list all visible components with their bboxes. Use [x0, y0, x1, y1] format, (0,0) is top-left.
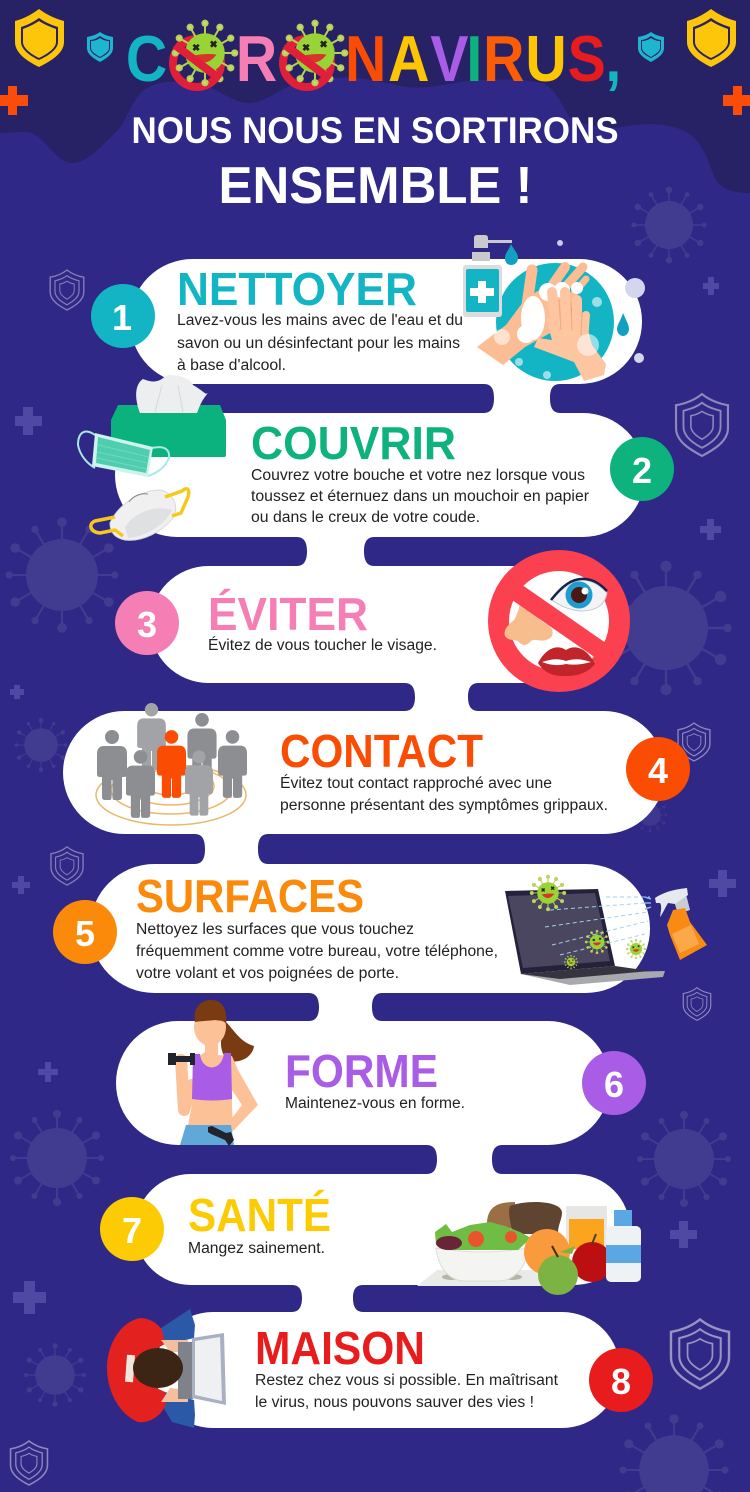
title line 1: V [430, 23, 469, 95]
body text [136, 921, 498, 982]
background virus [6, 517, 118, 633]
body text [255, 1372, 559, 1411]
background shield [671, 1319, 729, 1389]
heading: nettoyer: NETTOYER [177, 263, 417, 315]
icon: hand washing [477, 263, 614, 381]
number badge 1 [91, 284, 155, 348]
background virus [631, 187, 707, 263]
icon: crossed virus 1 [173, 21, 237, 87]
panel: eviter [115, 550, 630, 692]
body text: Lavez-vous les mains avec de l'eau et du [177, 312, 463, 329]
number badge 3: 3 [137, 604, 157, 645]
number badge 5 [53, 900, 117, 964]
body text: ou dans le creux de votre coude. [251, 509, 480, 526]
icon: person at laptop from above [107, 1309, 226, 1428]
number badge 2: 2 [632, 450, 652, 491]
body text: Nettoyez les surfaces que vous touchez [136, 921, 414, 938]
icon: teal shield right [638, 32, 664, 62]
dark wave header [0, 0, 750, 193]
number badge 3 [115, 591, 179, 655]
body text: le virus, nous pouvons sauver des vies ! [255, 1394, 534, 1411]
background virus [633, 798, 667, 832]
icon: tissue box [111, 375, 226, 457]
panel: couvrir [78, 375, 674, 540]
title line 1: C [126, 23, 167, 95]
number badge 2 [610, 437, 674, 501]
background virus [24, 1343, 86, 1407]
number badge 7: 7 [122, 1210, 142, 1251]
number badge 1: 1 [112, 297, 132, 338]
title [126, 21, 621, 215]
number badge 8 [589, 1348, 653, 1412]
heading: surfaces: SURFACES [136, 870, 364, 922]
background virus [15, 718, 67, 772]
background shield [11, 1441, 47, 1485]
icon: woman with dumbbells [168, 1000, 258, 1146]
icon: respirator mask [91, 489, 189, 540]
title line 1: I [466, 23, 482, 95]
background shield [683, 988, 711, 1020]
number badge 4 [626, 737, 690, 801]
icon: crossed virus 2 [283, 21, 347, 87]
heading: eviter: ÉVITER [208, 588, 368, 640]
title line 1: U [525, 23, 567, 95]
panel: maison [107, 1309, 653, 1428]
icon: orange plus left [0, 86, 28, 115]
icon: sanitizer bottle [463, 235, 518, 317]
icon: spray bottle [645, 888, 707, 960]
number badge 8: 8 [611, 1361, 631, 1402]
heading: sante: SANTÉ [188, 1189, 331, 1241]
background crosses [10, 277, 736, 1314]
panel: surfaces [53, 870, 707, 985]
body text: fréquemment comme votre bureau, votre téléphone, [136, 943, 498, 960]
title line 1: S [568, 23, 606, 95]
number badge 4: 4 [648, 750, 668, 791]
body text [177, 312, 463, 374]
title line 1: R [483, 23, 524, 95]
title line 1: R [236, 23, 277, 95]
body text: Mangez sainement. [188, 1240, 325, 1257]
background shield [678, 723, 710, 761]
background virus [619, 1414, 729, 1492]
number badge 6 [582, 1051, 646, 1115]
title line 1: O [286, 23, 330, 95]
icon: yellow shield left [15, 9, 64, 67]
icon: laptop with viruses [505, 875, 665, 985]
body text: à base d'alcool. [177, 357, 286, 374]
icon: bubbles and drop [557, 240, 645, 363]
icon: healthy food [417, 1202, 641, 1295]
background shield [51, 847, 83, 885]
body text [280, 775, 608, 814]
panel: sante [100, 1189, 641, 1295]
background virus [637, 1111, 731, 1207]
heading: maison: MAISON [255, 1322, 425, 1374]
background virus [10, 1110, 104, 1206]
panel: forme [168, 1000, 646, 1146]
icon: orange plus right [723, 86, 750, 115]
body text: votre volant et vos poignées de porte. [136, 965, 399, 982]
background shield [676, 394, 728, 456]
body text: personne présentant des symptômes grippaux. [280, 797, 608, 814]
icon: teal shield left [87, 32, 113, 62]
white ribbon [63, 259, 665, 1428]
icon: surgical mask [78, 432, 169, 477]
title line 1: A [388, 23, 429, 95]
title line 1: , [605, 23, 621, 95]
body text: Restez chez vous si possible. En maîtrisant [255, 1372, 559, 1389]
background virus [600, 561, 732, 695]
panel: nettoyer [91, 235, 645, 381]
icon: yellow shield right [687, 9, 736, 67]
title line 1: O [176, 23, 220, 95]
body text: Évitez de vous toucher le visage. [208, 637, 437, 654]
heading: forme: FORME [285, 1045, 438, 1097]
body text [251, 467, 589, 526]
body text: toussez et éternuez dans un mouchoir en papier [251, 488, 589, 505]
body text: Couvrez votre bouche et votre nez lorsque vous [251, 467, 585, 484]
background shield [50, 270, 84, 310]
number badge 6: 6 [604, 1064, 624, 1105]
body text: savon ou un désinfectant pour les mains [177, 335, 460, 352]
icon: no touching face [488, 550, 630, 692]
header icons [0, 9, 750, 115]
title line 2: NOUS NOUS EN SORTIRONS [132, 110, 618, 151]
number badge 7 [100, 1197, 164, 1261]
heading: contact: CONTACT [280, 725, 483, 777]
title line 3: ENSEMBLE ! [218, 157, 532, 215]
number badge 5: 5 [75, 913, 95, 954]
body text: Évitez tout contact rapproché avec une [280, 775, 552, 792]
panel: contact [96, 703, 690, 825]
title line 1: N [345, 23, 386, 95]
body text: Maintenez-vous en forme. [285, 1095, 465, 1112]
heading: couvrir: COUVRIR [251, 417, 456, 469]
icon: crowd with distance rings [96, 703, 247, 825]
